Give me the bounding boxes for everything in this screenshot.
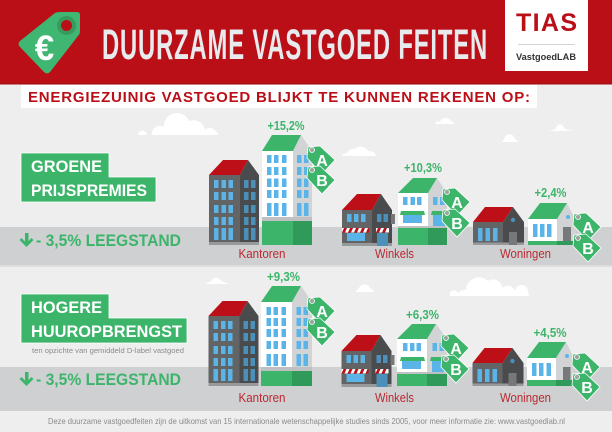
tags: A and B office section two: B <box>316 325 328 342</box>
tags: A and B house section one <box>573 213 601 262</box>
label panel: groene prijspremies: GROENE <box>31 158 102 176</box>
vacancy stat section two: - 3,5% LEEGSTAND <box>36 371 181 389</box>
label: kantoren section one: Kantoren <box>238 247 286 261</box>
subtitle bar: ENERGIEZUINIG VASTGOED BLIJKT TE KUNNEN REKENEN OP: <box>28 89 530 106</box>
tags: A and B shop section one <box>442 188 470 237</box>
building: green office section one <box>262 135 312 245</box>
clouds: section two <box>205 277 529 296</box>
ground band: section two <box>0 367 612 411</box>
tags: A and B shop section one: B <box>451 216 463 233</box>
label panel: hogere huuropbrengst: HUUROPBRENGST <box>31 323 182 341</box>
building: gray house section one <box>473 207 524 245</box>
building: gray office section one <box>209 160 259 245</box>
building: green office section two <box>261 286 312 386</box>
label: winkels section two: Winkels <box>375 391 414 405</box>
label: kantoren section two: Kantoren <box>238 391 286 405</box>
ground band: section one <box>0 227 612 265</box>
value: shop section one: +10,3% <box>404 161 442 175</box>
logo: TIAS VastgoedLAB: VastgoedLAB <box>516 52 576 63</box>
tags: A and B office section one: B <box>316 173 328 190</box>
tags: A and B shop section two: A <box>450 341 462 358</box>
tags: A and B shop section two <box>441 334 469 383</box>
value: office section one: +15,2% <box>268 119 304 133</box>
icon: down arrow section two <box>20 372 34 386</box>
tags: A and B house section two: A <box>581 360 593 377</box>
building: gray shop section one <box>342 194 395 246</box>
vacancy stat section one: - 3,5% LEEGSTAND <box>36 232 181 250</box>
clouds: section one <box>138 113 574 156</box>
label: woningen section two: Woningen <box>500 391 551 405</box>
tags: A and B office section one <box>307 146 335 194</box>
icon: euro price tag <box>18 12 80 74</box>
label panel: groene prijspremies: PRIJSPREMIES <box>31 182 147 200</box>
logo: TIAS VastgoedLAB: TIAS <box>516 9 577 37</box>
building: green shop section one <box>398 178 447 245</box>
building: green house section two <box>527 342 574 386</box>
label: woningen section one: Woningen <box>500 247 551 261</box>
tags: A and B office section two <box>307 297 335 346</box>
tags: A and B shop section two: B <box>450 362 462 379</box>
label panel: hogere huuropbrengst <box>21 294 187 343</box>
building: green house section one <box>528 203 575 245</box>
header band <box>0 0 612 84</box>
tags: A and B house section two: B <box>581 380 593 397</box>
label: winkels section one: Winkels <box>375 247 414 261</box>
icon: down arrow section one <box>20 233 34 247</box>
building: gray shop section two <box>342 335 394 387</box>
value: office section two: +9,3% <box>267 270 300 284</box>
tags: A and B shop section one: A <box>451 195 463 212</box>
tags: A and B office section two: A <box>316 304 328 321</box>
label panel: groene prijspremies <box>21 153 156 202</box>
note under label: ten opzichte van gemiddeld D-label vastgoed <box>32 346 184 355</box>
section divider <box>0 265 612 267</box>
building: green shop section two <box>397 324 447 386</box>
value: shop section two: +6,3% <box>406 308 439 322</box>
tags: A and B house section one: B <box>582 241 594 258</box>
value: house section one: +2,4% <box>534 186 566 200</box>
tags: A and B house section one: A <box>582 220 594 237</box>
icon: euro price tag: € <box>35 29 54 68</box>
value: house section two: +4,5% <box>534 326 566 340</box>
tags: A and B house section two <box>572 353 600 401</box>
tags: A and B office section one: A <box>316 153 328 170</box>
label panel: hogere huuropbrengst: HOGERE <box>31 299 102 317</box>
building: gray house section two <box>472 348 524 386</box>
footer note: Deze duurzame vastgoedfeiten zijn de uitkomst van 15 internationale wetenschappelijke studies sinds 2005, voor meer informatie zie: www.vastgoedlab.nl <box>48 416 565 426</box>
building: gray office section two <box>208 301 258 386</box>
logo: TIAS VastgoedLAB <box>505 0 588 71</box>
